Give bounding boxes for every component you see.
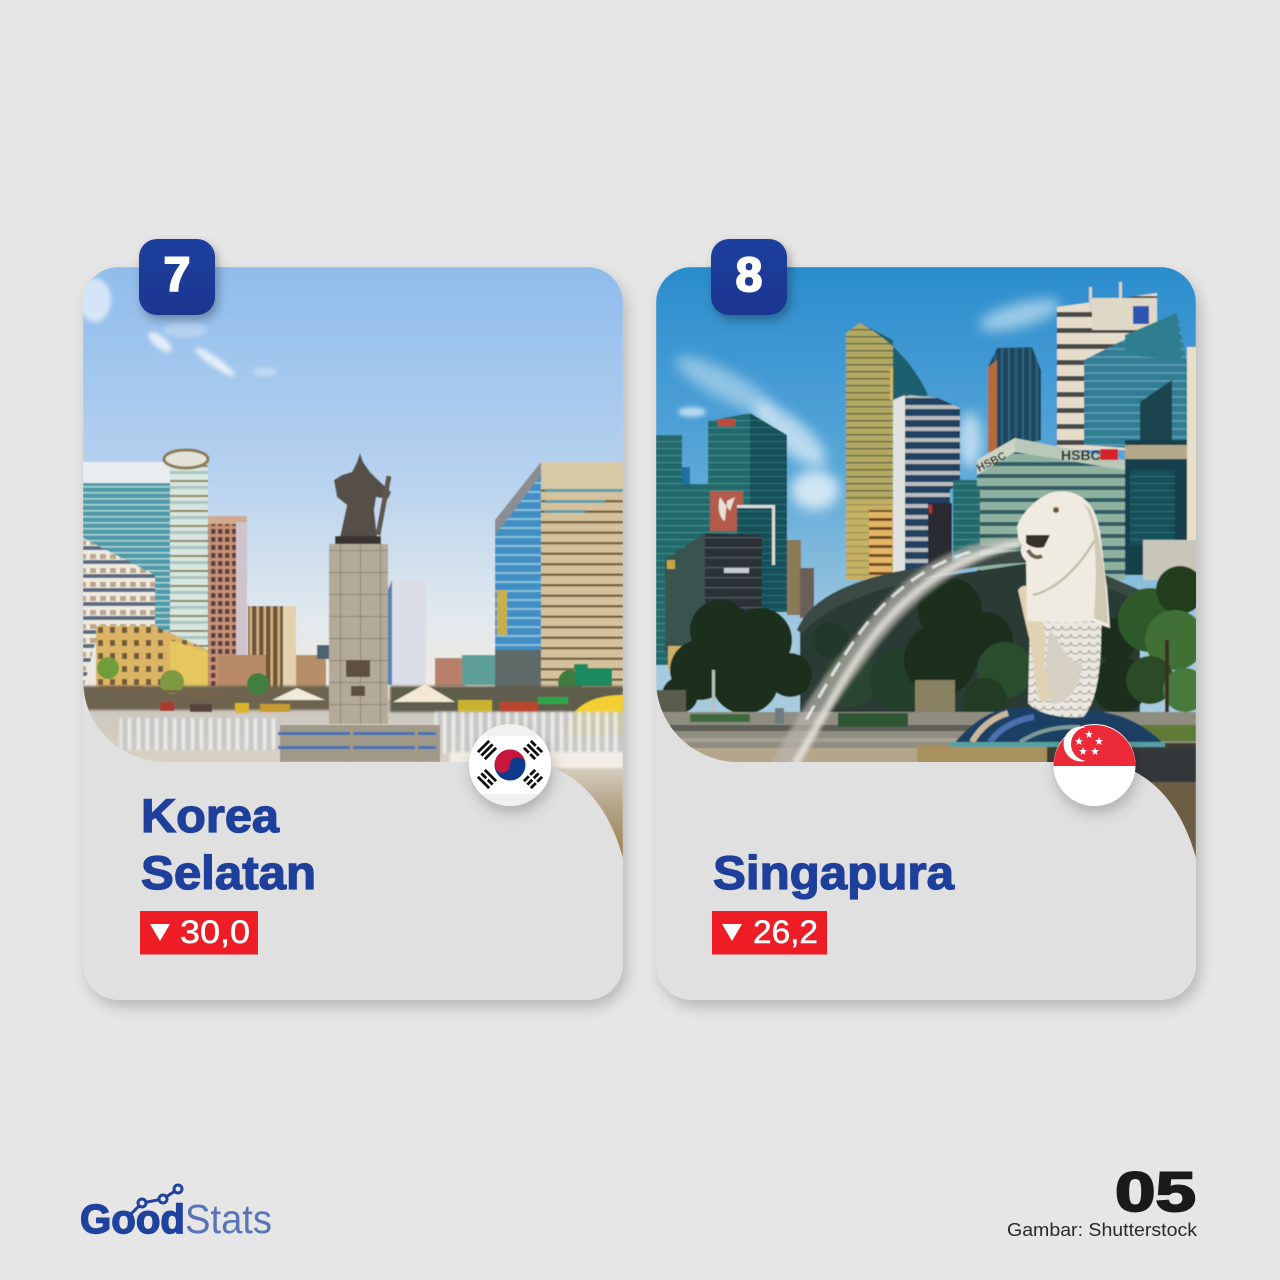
logo: GoodStats: Stats	[185, 1196, 272, 1242]
HSBC building	[977, 438, 1125, 580]
card base	[656, 267, 1196, 1000]
statue of Admiral Yi	[334, 453, 391, 544]
ground and steps	[662, 711, 1196, 749]
rank badge 7: 7	[164, 249, 190, 302]
country name: Singapura: Singapura	[713, 846, 955, 899]
MYP glass tower	[1084, 313, 1187, 452]
fence around plinth	[278, 725, 440, 762]
glass tower with curved top	[846, 323, 928, 580]
ground layer	[83, 700, 623, 872]
cream tower	[1057, 293, 1157, 450]
logo: GoodStats	[80, 1185, 272, 1242]
country name: Korea Selatan: Selatan	[141, 846, 316, 899]
country name: Korea Selatan	[141, 789, 316, 899]
dark tower	[988, 347, 1041, 452]
flag: South Korea	[469, 724, 551, 806]
rank badge 7	[139, 239, 215, 315]
panel: Singapura card	[656, 239, 1207, 1000]
photo: Marina Bay Merlion: HSBC	[975, 450, 1008, 475]
value tag: down 26,2: 26,2	[753, 914, 818, 950]
value tag: down 26,2	[712, 911, 827, 954]
card base	[83, 267, 623, 1000]
logo: GoodStats: Good	[80, 1196, 185, 1242]
value tag: down 30,0	[140, 911, 258, 954]
building under roof	[800, 560, 1140, 720]
Merlion statue	[1017, 491, 1110, 717]
statue plinth	[329, 544, 388, 724]
logo chart line icon	[128, 1185, 182, 1217]
photo: Marina Bay Merlion: HSBC	[1061, 447, 1101, 463]
fountain jet	[770, 538, 1026, 765]
rank badge 8	[711, 239, 787, 315]
panel: Korea Selatan card	[79, 239, 623, 1000]
rank badge 8: 8	[736, 249, 762, 302]
image credit: Gambar: Shutterstock	[1007, 1220, 1198, 1240]
country name: Korea Selatan: Korea	[141, 789, 280, 842]
photo: Seoul Gwanghwamun square	[79, 267, 623, 872]
Merlion base	[950, 707, 1165, 747]
trees	[662, 566, 1207, 722]
flag: Singapore	[1054, 724, 1136, 806]
value tag: down 30,0: 30,0	[180, 914, 250, 950]
arched roof behind fountain	[797, 550, 1140, 634]
page number: 05	[1115, 1160, 1196, 1223]
photo: Marina Bay Merlion	[656, 267, 1207, 867]
